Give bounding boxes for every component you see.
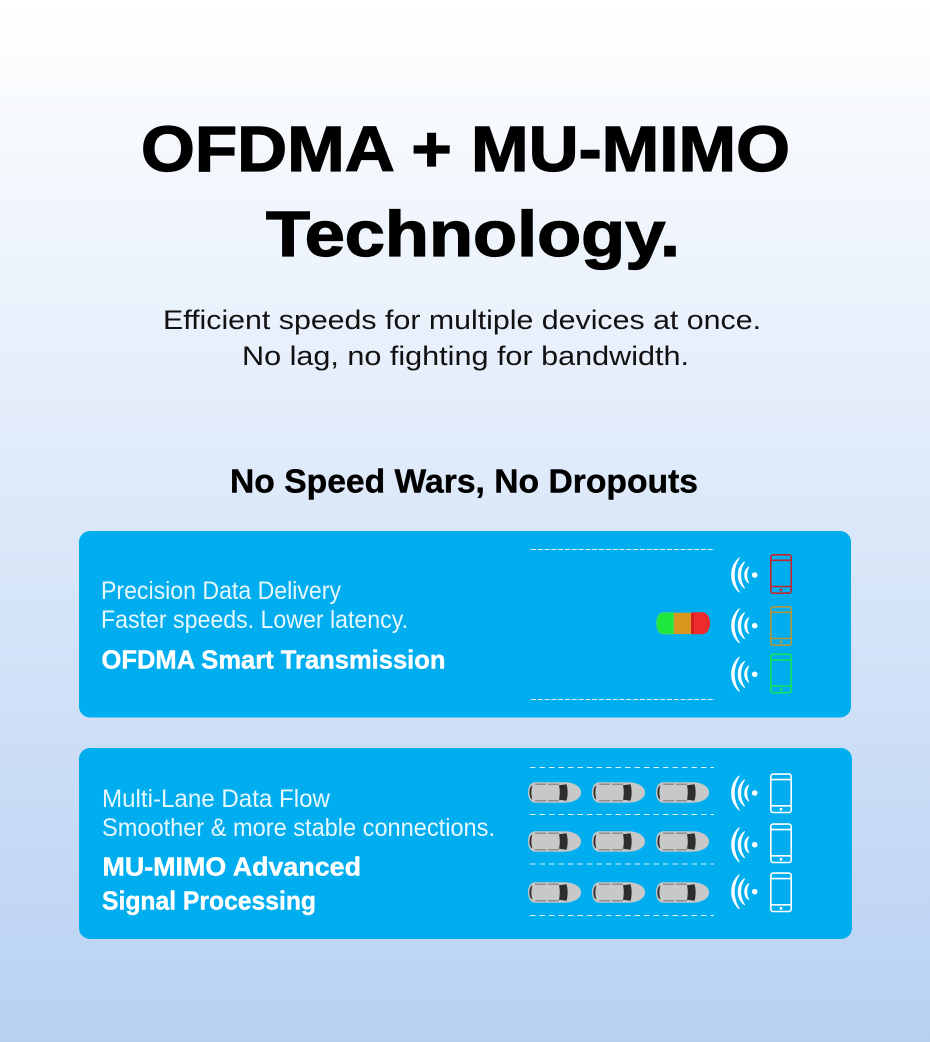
panel: MU-MIMO — [79, 748, 852, 939]
icon: wifi signal 2 — [732, 828, 758, 862]
text block: MU-MIMO description — [102, 785, 495, 842]
heading: MU-MIMO Advanced Signal Processing — [102, 852, 361, 916]
icon: red phone — [771, 555, 791, 593]
text block: MU-MIMO description: Multi-Lane Data Flow — [102, 785, 331, 813]
text block: OFDMA description — [101, 577, 408, 634]
section heading: No Speed Wars, No Dropouts — [230, 464, 698, 500]
icon: wifi signal 2 — [732, 609, 758, 643]
lane lines — [530, 768, 714, 916]
icon: wifi signal 3 — [732, 657, 758, 691]
icon: white phone 1 — [771, 774, 791, 812]
title: Technology. — [266, 198, 680, 270]
lane lines — [531, 550, 715, 700]
panel: OFDMA — [79, 531, 851, 718]
cars row 2 — [528, 831, 709, 852]
panel background: MU-MIMO — [79, 748, 852, 939]
text block: MU-MIMO description: Smoother & more stable connections. — [102, 814, 495, 842]
icon: orange phone — [771, 607, 791, 645]
heading: OFDMA Smart Transmission: OFDMA Smart Transmission — [102, 644, 446, 674]
title: OFDMA + MU-MIMO — [141, 113, 790, 185]
icon: multicolor car — [657, 612, 710, 634]
heading: MU-MIMO Advanced Signal Processing: MU-MIMO Advanced — [102, 852, 361, 882]
icon: wifi signal 1 — [732, 776, 758, 810]
panel background: OFDMA — [79, 531, 851, 718]
cars row 3 — [528, 882, 709, 903]
text block: OFDMA description: Faster speeds. Lower latency. — [101, 606, 408, 634]
icon: green phone — [771, 654, 791, 693]
cars row 1 — [528, 782, 709, 803]
subtitle — [163, 305, 761, 371]
icon: white phone 2 — [771, 824, 791, 862]
text block: OFDMA description: Precision Data Delivery — [101, 577, 341, 605]
subtitle: Efficient speeds for multiple devices at once. — [163, 305, 761, 335]
icon: white phone 3 — [771, 873, 791, 912]
title — [141, 113, 790, 270]
heading: MU-MIMO Advanced Signal Processing: Signal Processing — [102, 886, 316, 916]
icon: wifi signal 1 — [732, 558, 758, 592]
icon: wifi signal 3 — [732, 875, 758, 909]
subtitle: No lag, no fighting for bandwidth. — [242, 341, 689, 371]
